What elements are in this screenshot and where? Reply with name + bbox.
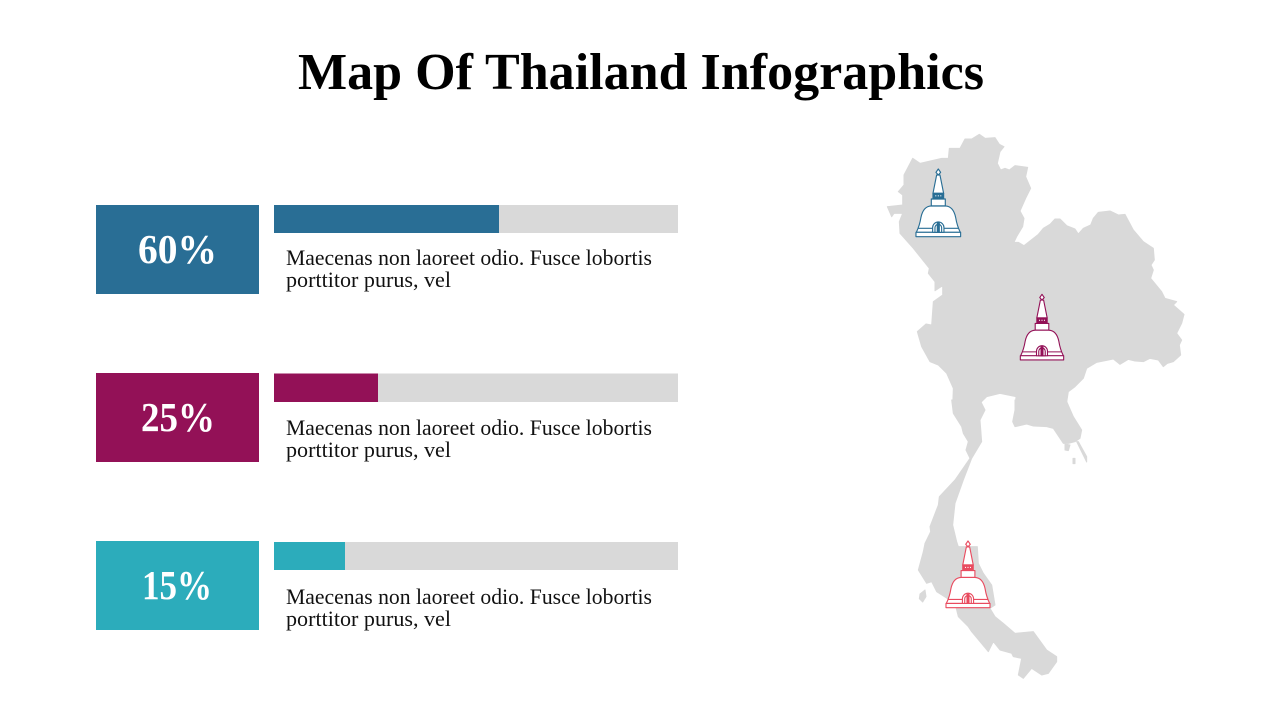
- icon: maroon stupa: [1020, 294, 1064, 360]
- icon: red stupa: [946, 541, 990, 608]
- text block: row 2 description: Maecenas non laoreet odio. Fusce lobortis: [286, 415, 652, 440]
- percentage box: 15%: [96, 541, 259, 630]
- percentage box: 15%: 15%: [142, 562, 212, 608]
- progress bar: 25%: [274, 374, 678, 402]
- percentage box: 60%: 60%: [138, 226, 217, 272]
- text block: row 1 description: porttitor purus, vel: [286, 267, 451, 292]
- percentage box: 25%: 25%: [141, 394, 215, 440]
- icon: blue stupa: [916, 169, 961, 237]
- text block: row 2 description: porttitor purus, vel: [286, 437, 451, 462]
- text block: row 2 description: [286, 415, 652, 462]
- text block: row 3 description: Maecenas non laoreet odio. Fusce lobortis: [286, 584, 652, 609]
- panel: 15% row: [96, 541, 678, 631]
- title: Map Of Thailand Infographics: [298, 44, 984, 101]
- panel: 60% row: [96, 205, 678, 294]
- text block: row 1 description: [286, 245, 652, 292]
- percentage box: 60%: [96, 205, 259, 294]
- progress bar: 60%: [274, 205, 678, 233]
- text block: row 3 description: [286, 584, 652, 631]
- text block: row 3 description: porttitor purus, vel: [286, 606, 451, 631]
- map of Thailand: [887, 134, 1184, 678]
- panel: 25% row: [96, 373, 678, 462]
- progress bar: 15%: [274, 542, 678, 570]
- text block: row 1 description: Maecenas non laoreet odio. Fusce lobortis: [286, 245, 652, 270]
- percentage box: 25%: [96, 373, 259, 462]
